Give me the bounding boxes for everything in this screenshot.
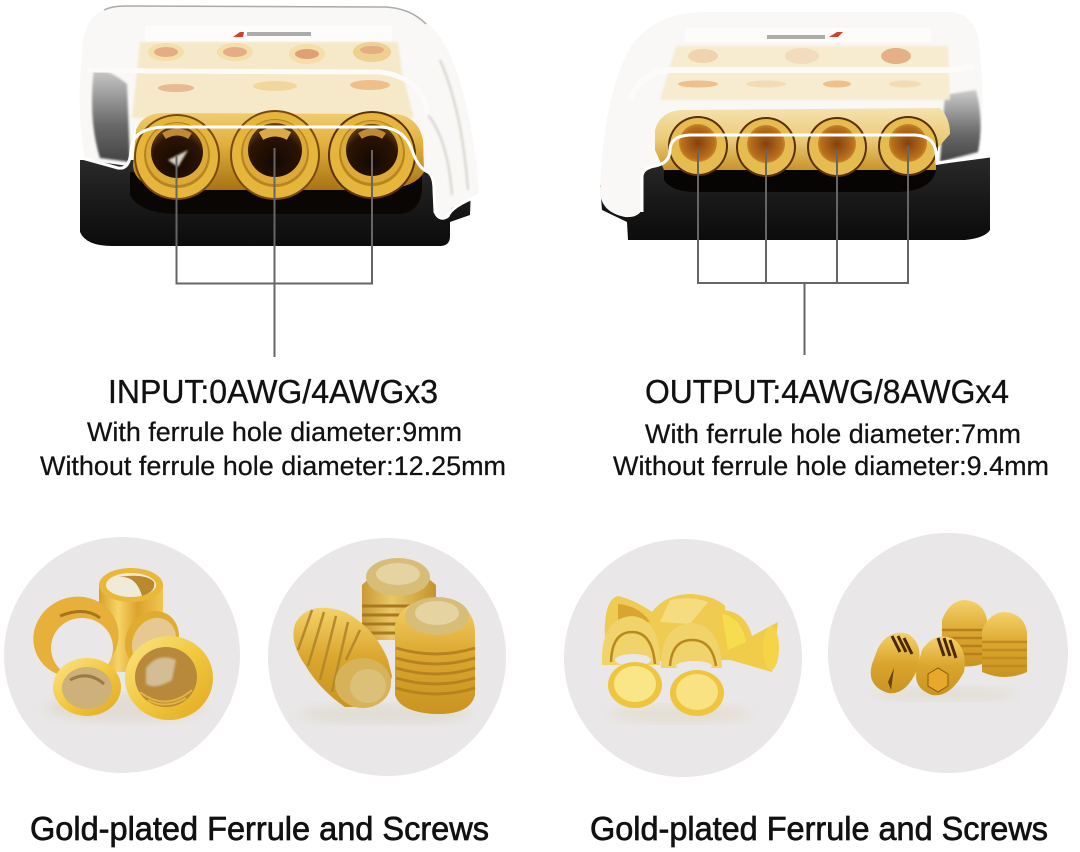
circle photo: small screws — [828, 533, 1068, 773]
input no-ferrule diameter: Without ferrule hole diameter:12.25mm — [40, 451, 506, 481]
tilted left ferrule — [22, 585, 130, 689]
gold block front — [133, 113, 424, 190]
front right screw — [916, 636, 965, 695]
cover highlight band — [88, 70, 428, 118]
front right ferrule — [125, 636, 213, 720]
contact shadow — [875, 687, 1015, 701]
front left ferrule — [53, 658, 121, 716]
gold block front — [655, 108, 950, 170]
label strip — [685, 28, 931, 42]
back left screw — [942, 600, 987, 667]
label strip — [145, 26, 392, 41]
input heading: INPUT:0AWG/4AWGx3 — [108, 373, 438, 410]
lying screw — [293, 608, 392, 708]
contact shadow — [300, 704, 470, 724]
hole one — [134, 114, 220, 200]
circle photo: large screws — [268, 538, 506, 776]
product photo: output block — [600, 12, 990, 240]
dark interior seen through cover — [940, 90, 981, 162]
back ferrule — [99, 568, 163, 672]
front left ferrule — [608, 662, 662, 708]
cover opening edge — [642, 135, 990, 212]
cover side streaks — [428, 60, 468, 195]
hole one — [668, 116, 728, 176]
hole two — [230, 110, 320, 200]
top screw heads row one — [148, 42, 391, 64]
product photo: input block — [80, 6, 479, 246]
cover top edge — [104, 6, 426, 24]
black base — [80, 160, 472, 246]
output heading: OUTPUT:4AWG/8AWGx4 — [645, 373, 1009, 410]
contact shadow — [45, 694, 205, 722]
input ferrule diameter: With ferrule hole diameter:9mm — [87, 417, 462, 447]
brand mark — [829, 32, 843, 37]
contact shadow — [610, 705, 750, 723]
hole four — [878, 116, 938, 176]
circle photo: small ferrules — [564, 539, 802, 777]
input bracket lines — [176, 148, 372, 357]
back screw — [362, 558, 436, 640]
cover opening edge — [82, 127, 478, 218]
right tilted ferrule — [716, 610, 779, 672]
cover highlight band — [630, 66, 975, 100]
brand mark — [233, 32, 244, 37]
right caption: Gold-plated Ferrule and Screws — [590, 810, 1048, 847]
dark interior seen through cover — [92, 68, 130, 162]
output no-ferrule diameter: Without ferrule hole diameter:9.4mm — [613, 451, 1049, 481]
back ferrules — [605, 594, 730, 662]
gold top under cover — [132, 42, 414, 118]
front right ferrule — [670, 670, 724, 716]
output ferrule diameter: With ferrule hole diameter:7mm — [645, 419, 1021, 449]
right screw — [395, 597, 475, 714]
front left screw — [871, 633, 920, 693]
gold top under cover — [660, 46, 950, 100]
circle photo: large ferrules — [4, 537, 240, 773]
hole two — [736, 117, 796, 177]
middle ring — [114, 601, 190, 679]
dark recess — [664, 160, 936, 192]
top screw heads row two — [158, 80, 390, 92]
centre arch — [661, 623, 722, 671]
clear cover — [80, 6, 479, 219]
black base — [600, 156, 990, 240]
left caption: Gold-plated Ferrule and Screws — [30, 810, 489, 847]
output bracket lines — [698, 146, 908, 355]
dark recess — [130, 172, 422, 214]
lower screw heads row — [678, 80, 921, 88]
hole three — [328, 111, 416, 199]
back right screw — [982, 612, 1027, 677]
output specification text — [613, 373, 1049, 481]
left arch — [602, 616, 660, 666]
input specification text — [40, 373, 506, 481]
clear cover — [600, 12, 983, 217]
hole three — [807, 117, 867, 177]
top screw heads row — [688, 48, 911, 64]
